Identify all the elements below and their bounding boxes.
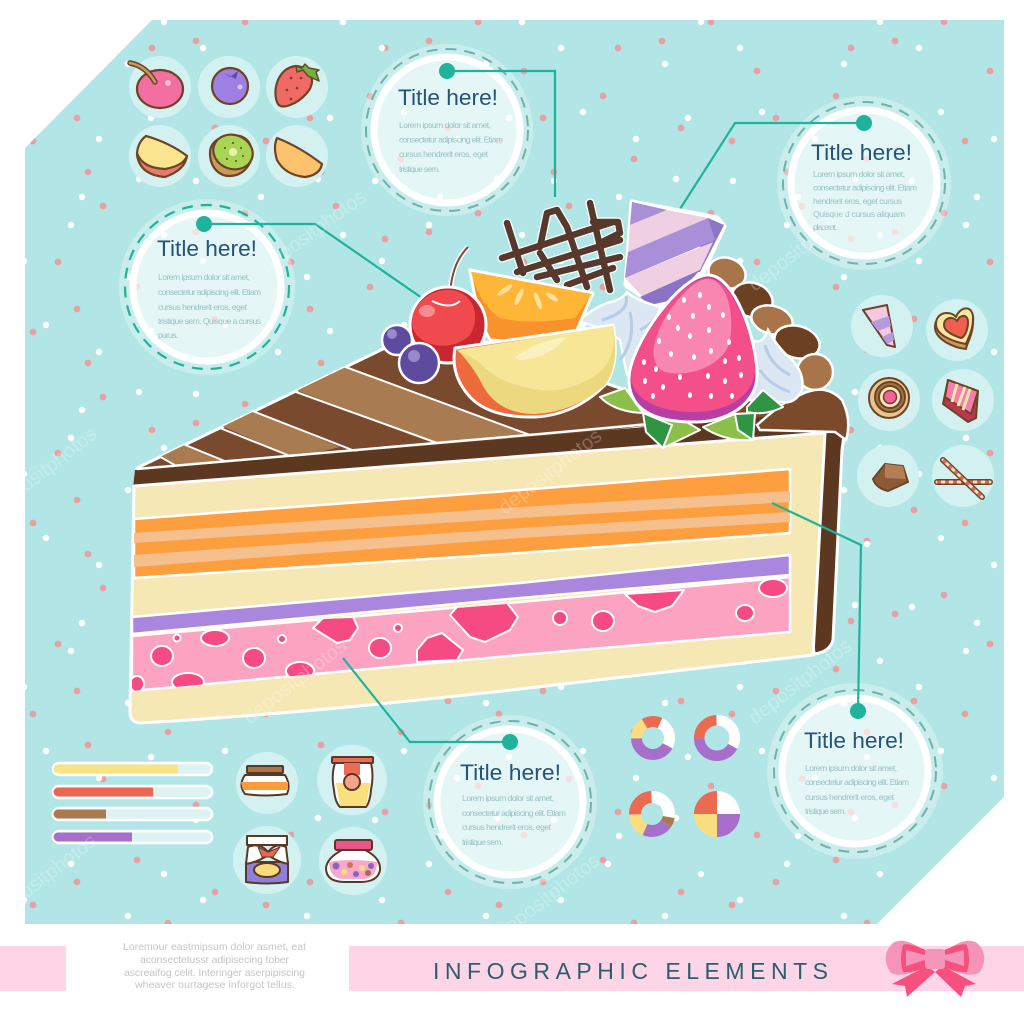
text block: callout body xyxy=(805,763,909,816)
text block: footer description xyxy=(123,941,306,991)
heading: infographic elements: INFOGRAPHIC ELEMENTS xyxy=(433,958,828,984)
connector lines: lower callouts to cake layers xyxy=(343,503,866,750)
watermarks: depositphotos xyxy=(495,425,606,519)
callout: bottom centre xyxy=(423,715,597,889)
text block: callout body: Lorem ipsum dolor sit amet, xyxy=(158,272,250,282)
bar: brown xyxy=(53,808,212,820)
text block: callout body: cursus hendrerit eros, eget xyxy=(805,792,895,802)
cream swirl lines xyxy=(602,296,660,360)
text block: callout body xyxy=(158,272,261,340)
strawberry xyxy=(629,275,757,422)
orange layer xyxy=(134,469,790,578)
text block: callout body: tristique sem. xyxy=(462,837,503,847)
blueberries xyxy=(382,325,439,383)
callout: bottom right xyxy=(767,683,943,859)
cherry xyxy=(410,247,486,363)
chocolate dollops xyxy=(704,252,848,440)
apple slice xyxy=(454,325,615,417)
text block: footer description: ascreaifog celit. Interinger aserpipiscing xyxy=(124,967,305,979)
bar: yellow xyxy=(53,763,212,775)
text block: callout body: Lorem ipsum dolor sit amet, xyxy=(399,120,491,130)
text block: footer description: aconsectetussr adipisecing tober xyxy=(140,954,290,966)
heading: callout title: Title here! xyxy=(460,760,561,785)
text block: callout body: Lorem ipsum dolor sit amet, xyxy=(813,169,905,179)
orange peach slice xyxy=(470,270,593,345)
text block: callout body: consectetur adipiscing elit. Etiam xyxy=(399,135,503,145)
whipped cream left xyxy=(577,292,660,375)
callout: upper right xyxy=(777,96,951,270)
text block: callout body: cursus hendrerit eros, eget xyxy=(158,302,248,312)
donut charts xyxy=(635,720,740,837)
pink jelly layer with fruit pieces xyxy=(130,577,790,692)
leaves xyxy=(600,388,783,448)
text block: callout body: consectetur adipiscing elit. Etiam xyxy=(805,777,909,787)
footer band right xyxy=(349,946,1024,991)
heading: callout title: Title here! xyxy=(157,236,257,261)
text block: callout body: cursus hendrerit eros, eget xyxy=(399,149,489,159)
text block: callout body: Lorem ipsum dolor sit amet, xyxy=(805,763,897,773)
text block: callout body xyxy=(813,169,917,232)
donut chart 3 xyxy=(635,797,669,831)
watermarks: depositphotos xyxy=(240,635,351,729)
footer band left xyxy=(0,946,66,991)
donut chart 2 xyxy=(699,720,735,756)
watermarks: depositphotos xyxy=(745,202,856,296)
chocolate lattice xyxy=(502,203,620,290)
progress bars xyxy=(53,763,212,843)
callout: top centre xyxy=(361,44,533,216)
icon set: fruit xyxy=(129,56,328,187)
donut chart 1 xyxy=(636,722,670,754)
top chocolate surface xyxy=(133,340,830,488)
text block: callout body: Quisque d cursus aliquam xyxy=(813,209,905,219)
text block: callout body: tristique sem. xyxy=(805,806,846,816)
text block: callout body: tristique sem. Quisque a cursus xyxy=(158,316,261,326)
front face cream xyxy=(130,433,825,723)
side wall chocolate xyxy=(800,405,844,654)
connector lines: top callouts to toppings xyxy=(196,63,872,298)
pie chart xyxy=(694,791,740,837)
watermarks: depositphotos xyxy=(493,850,604,944)
marshmallow candy xyxy=(625,202,724,308)
text block: callout body: Lorem ipsum dolor sit amet, xyxy=(462,793,554,803)
text block: callout body: tristique sem. xyxy=(399,164,440,174)
text block: footer description: wheaver ourtagese inforgot tellus. xyxy=(134,979,295,991)
text block: callout body: consectetur adipiscing elit. Etiam xyxy=(462,808,566,818)
icon set: sweets xyxy=(851,295,994,507)
text block: callout body xyxy=(399,120,503,174)
heading: callout title: Title here! xyxy=(398,85,498,110)
text block: footer description: Loremour eastmipsum dolor asmet, eat xyxy=(123,941,306,953)
purple layer xyxy=(132,555,790,634)
cream swirl lines right xyxy=(760,345,790,392)
heading: callout title: Title here! xyxy=(804,728,904,753)
watermarks xyxy=(0,0,856,944)
illustration: cake slice xyxy=(130,202,848,723)
whipped cream right xyxy=(745,330,802,402)
icon: pink bow xyxy=(886,941,984,997)
text block: callout body: consectetur adipiscing elit. Etiam xyxy=(158,287,261,297)
bar: purple xyxy=(53,831,212,843)
text block: callout body: placerat. xyxy=(813,222,837,232)
text block: callout body: cursus hendrerit eros, eget xyxy=(462,822,552,832)
text block: callout body: purus. xyxy=(158,330,178,340)
callout: upper left xyxy=(119,199,295,375)
bar: red xyxy=(53,786,212,798)
heading: callout title: Title here! xyxy=(811,140,912,165)
text block: callout body: hendrerit eros, eget cursus xyxy=(813,196,902,206)
watermarks: depositphotos xyxy=(257,186,371,277)
text block: callout body: consectetur adipiscing elit. Etiam xyxy=(813,183,917,193)
icon set: jam jars xyxy=(233,745,387,895)
text block: callout body xyxy=(462,793,566,847)
watermarks: depositphotos xyxy=(745,635,856,729)
